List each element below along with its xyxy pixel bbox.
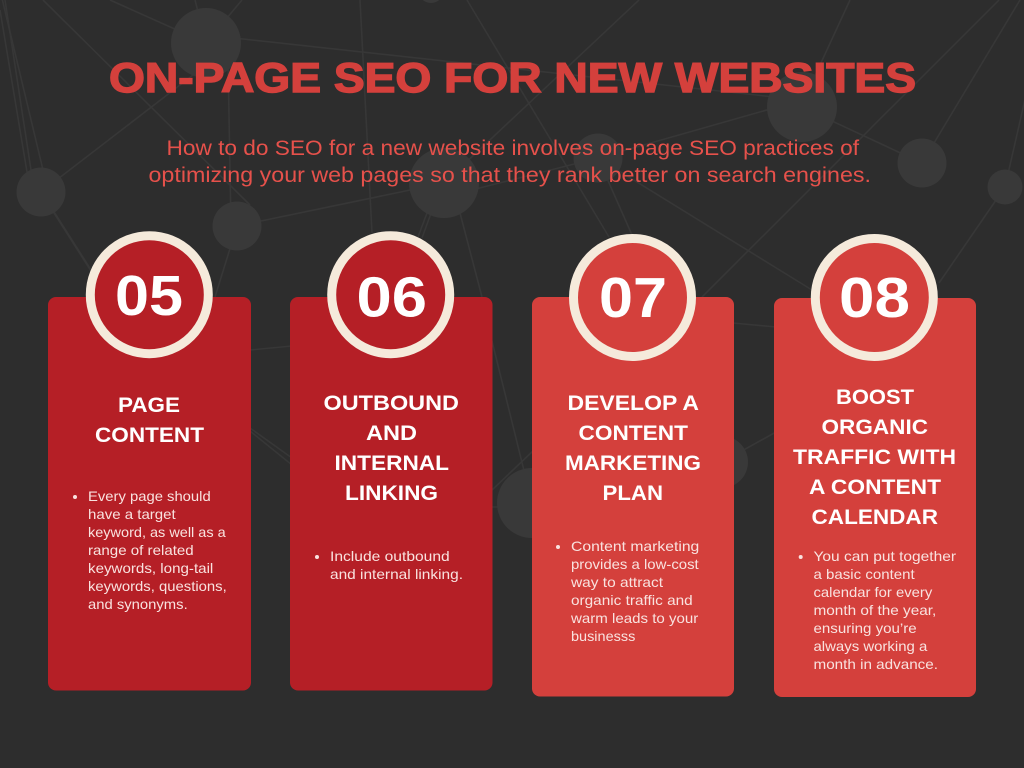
bullet text 05: have a target: [88, 507, 176, 522]
heading 05: CONTENT: [95, 424, 204, 447]
bullet text 08: always working a: [814, 639, 928, 654]
bullet text 07: provides a low-cost: [571, 557, 699, 572]
number badge 08: [815, 238, 933, 356]
background network of nodes and lines: [0, 0, 1024, 538]
card background 08: [774, 298, 976, 697]
bullet text 08: month in advance.: [814, 657, 938, 672]
panel: 06 outbound and internal linking: [290, 236, 492, 690]
bullet text 05: [73, 489, 227, 612]
heading 07: PLAN: [602, 482, 663, 505]
number badge 07: 07: [599, 266, 667, 330]
bullet text 08: ensuring you’re: [814, 621, 917, 636]
heading 06: [324, 392, 459, 505]
heading 07: CONTENT: [578, 422, 688, 445]
number badge 07: [574, 238, 692, 356]
bullet text 07: way to attract: [570, 575, 663, 590]
bullet text 07: warm leads to your: [570, 611, 699, 626]
bullet text 06: and internal linking.: [330, 567, 463, 582]
bullet text 07: Content marketing: [571, 539, 699, 554]
title: ON-PAGE SEO FOR NEW WEBSITES: [109, 54, 916, 101]
heading 06: AND: [366, 422, 417, 445]
heading 08: ORGANIC: [822, 416, 928, 439]
panel: 08 boost organic traffic: [774, 238, 976, 697]
bullet text 07: businesss: [571, 629, 636, 644]
subtitle: How to do SEO for a new website involves on-page SEO practices of: [166, 137, 859, 160]
heading 06: LINKING: [345, 482, 438, 505]
bullet text 08: a basic content: [814, 567, 915, 582]
bullet text 05: and synonyms.: [88, 597, 188, 612]
card background 07: [532, 297, 734, 696]
subtitle: [148, 137, 871, 187]
bullet text 05: range of related: [88, 543, 194, 558]
bullet text 05: keywords, questions,: [88, 579, 227, 594]
bullet text 05: Every page should: [88, 489, 211, 504]
number badge 05: 05: [115, 264, 183, 328]
heading 08: CALENDAR: [812, 506, 938, 529]
heading 07: DEVELOP A: [568, 392, 699, 415]
bullet text 08: [799, 549, 957, 672]
bullet text 07: [556, 539, 699, 644]
number badge 05: [90, 236, 208, 354]
heading 05: PAGE: [118, 394, 180, 417]
heading 08: BOOST: [836, 386, 914, 409]
heading 08: A CONTENT: [809, 476, 941, 499]
card background 06: [290, 297, 492, 690]
bullet text 08: calendar for every: [814, 585, 933, 600]
heading 06: INTERNAL: [334, 452, 449, 475]
bullet text 05: keyword, as well as a: [88, 525, 226, 540]
bullet text 08: You can put together: [814, 549, 957, 564]
panel: 07 develop a content marketing plan: [532, 238, 734, 696]
bullet text 07: organic traffic and: [571, 593, 693, 608]
panel: 05 page content: [48, 236, 251, 690]
bullet text 05: keywords, long-tail: [88, 561, 213, 576]
card background 05: [48, 297, 251, 690]
number badge 06: 06: [356, 266, 427, 330]
heading 06: OUTBOUND: [324, 392, 459, 415]
heading 08: [793, 386, 956, 529]
heading 05: [95, 394, 204, 447]
heading 07: [565, 392, 701, 505]
number badge 08: 08: [839, 266, 910, 330]
subtitle: optimizing your web pages so that they rank better on search engines.: [148, 164, 871, 187]
bullet text 06: [315, 549, 463, 582]
heading 07: MARKETING: [565, 452, 701, 475]
heading 08: TRAFFIC WITH: [793, 446, 956, 469]
number badge 06: [332, 236, 450, 354]
bullet text 06: Include outbound: [330, 549, 450, 564]
bullet text 08: month of the year,: [814, 603, 936, 618]
